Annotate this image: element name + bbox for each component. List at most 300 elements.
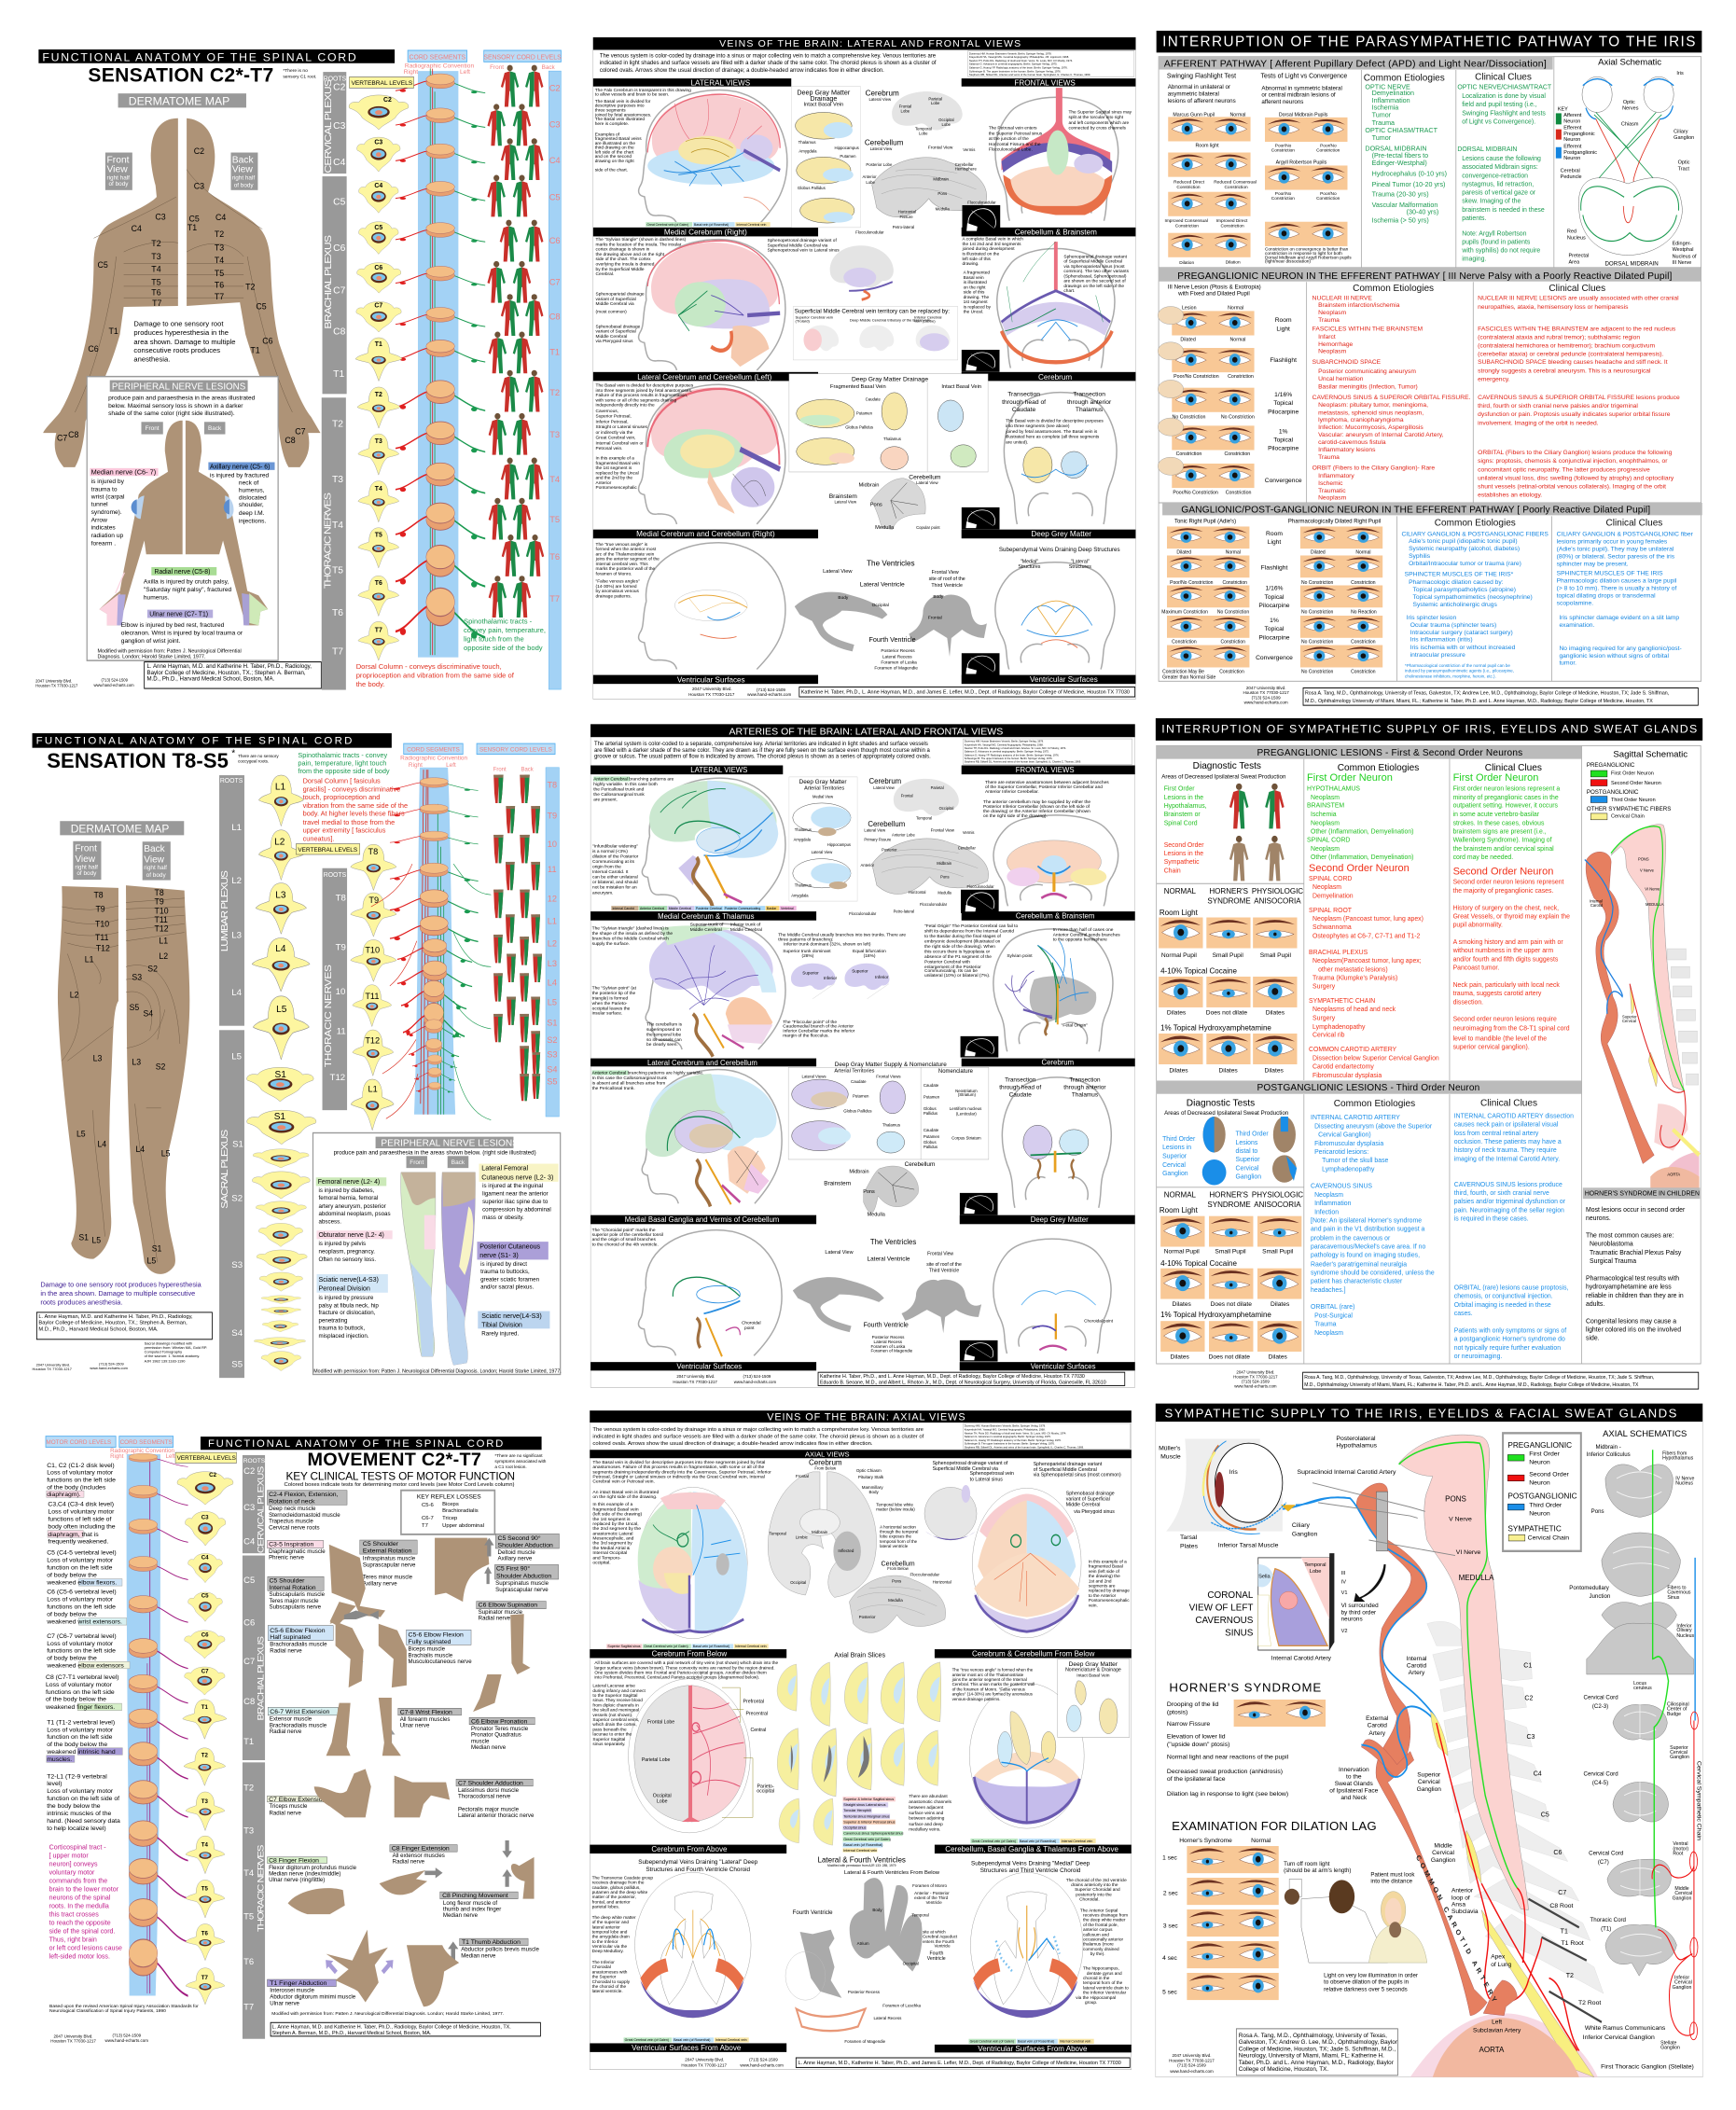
vertebrae: C3 bbox=[201, 1514, 209, 1520]
sensory cord levels heading bbox=[483, 50, 562, 71]
note: sylvian triangle: by the Superficial Middle bbox=[596, 267, 645, 272]
clinical clues: ganglionic: sphincter may be present. bbox=[1557, 561, 1629, 567]
etiologies: post: ORBITAL (rare) bbox=[1311, 1304, 1354, 1311]
deep gray matter territories: Thalamus bbox=[795, 827, 812, 832]
color key row: Posterior Communicating bbox=[725, 907, 760, 910]
note: subependymal left: Choroidal bbox=[592, 1964, 611, 1970]
brain: choroidal: and the origin of small branches bbox=[592, 1237, 656, 1242]
legend: PREGANGLIONIC bbox=[1507, 1441, 1572, 1450]
etiologies: post bbox=[1311, 1099, 1435, 1337]
etiologies: afferent: Pineal Tumor (10-20 yrs) bbox=[1372, 181, 1445, 188]
clinical clues: preganglionic: NUCLEAR III NERVE LESIONS are usually associated with other cranial bbox=[1478, 295, 1679, 301]
frontal brainstem arteries: In more than half of cases one bbox=[1053, 927, 1114, 933]
note: basal vein axial: An intact Basal vein is illustrated bbox=[592, 1490, 660, 1495]
sensory levels column: S1 bbox=[547, 1019, 557, 1028]
test: neck bbox=[267, 1491, 347, 1532]
references: Schlesinger B. The upper brainstem in the human. Berlin: Springer Verlag, 1976. bbox=[965, 1442, 1055, 1446]
note: venous angle: formed when the anterior most bbox=[596, 547, 657, 552]
credits: Computed Tomography bbox=[145, 1350, 182, 1354]
dorsal column note: Dorsal Column [ fasiculus bbox=[303, 776, 381, 784]
gray cerebrum from below: Mammillary bbox=[862, 1485, 883, 1490]
eye diagram: MEDULLA bbox=[1459, 1574, 1494, 1582]
leg dermatome figures: T12 bbox=[155, 924, 169, 934]
swinging flashlight column: Constriction bbox=[1224, 185, 1248, 190]
roots column: T6 bbox=[332, 608, 343, 618]
title: SYMPATHETIC SUPPLY TO THE IRIS, EYELIDS & FACIAL SWEAT GLANDS bbox=[1165, 1406, 1677, 1420]
superficial middle cerebral replacement box bbox=[793, 307, 958, 360]
note: sylvian triangle: marks the location of the insula. The insular bbox=[596, 242, 682, 247]
back view tag bbox=[231, 153, 257, 190]
dermatome note bbox=[40, 1280, 202, 1307]
references bbox=[968, 50, 1134, 76]
note: basal vein axial: replaced by the Uncal, bbox=[592, 1521, 639, 1527]
superficial middle cerebral replacement box: Superior Cerebral vein bbox=[796, 314, 833, 319]
footer: Houston TX 77030-1217 bbox=[673, 1380, 717, 1384]
deep gray matter territories: Hippocampus bbox=[827, 842, 851, 847]
test: shoulder adduction: Latissimus dorsi muscle bbox=[458, 1787, 520, 1794]
swinging flashlight column: Dilation bbox=[1179, 260, 1194, 266]
sphenopetrosal axial: via Sphenoparietal sinus (most common) bbox=[1034, 1473, 1121, 1478]
ganglionic eyes: Dilated bbox=[1311, 550, 1326, 556]
peripheral nerve lesions panel: mass or obesity. bbox=[482, 1215, 524, 1221]
key strips: Great Cerebral vein (of Galen) bbox=[644, 1645, 688, 1648]
panel: peripheral nerve lesions: humerus, bbox=[239, 487, 265, 493]
swinging flashlight column: Constriction bbox=[1271, 196, 1295, 201]
test: pinching: C8 Pinching Movement bbox=[442, 1893, 508, 1899]
panel: peripheral nerve lesions: olecranon. Wrist is injured by local trauma or bbox=[121, 631, 243, 637]
motor level text: level) bbox=[47, 1781, 62, 1787]
brainstem cerebellum lateral: Cerebellum bbox=[909, 475, 941, 481]
note: subependymal right: drains anteriorly into the bbox=[1071, 1882, 1118, 1888]
body dermatome figure: C3 bbox=[155, 213, 166, 222]
swinging flashlight column: Poor/No bbox=[1275, 144, 1292, 149]
artery labels: Internal bbox=[1406, 1656, 1427, 1662]
corticospinal note: Thus, right brain bbox=[49, 1936, 97, 1943]
clinical clues: ganglionic bbox=[1557, 518, 1694, 667]
cerebrum cerebellum from above right: Deep Gray Matter bbox=[1069, 1661, 1118, 1668]
diagnostic tests: post: Areas of Decreased Ipsilateral Sweat Production bbox=[1164, 1110, 1289, 1117]
etiologies: post: INTERNAL CAROTID ARTERY bbox=[1311, 1115, 1400, 1121]
body dermatome figure: T2 bbox=[245, 282, 256, 291]
frontal cerebellum arteries: on the right side of the drawing). bbox=[983, 813, 1048, 819]
panel: peripheral nerve lesions: Modified with permission from: Patten J. Neurological Differential bbox=[97, 648, 242, 654]
test: thumb abduction: T1 Thumb Abduction bbox=[462, 1939, 521, 1946]
diagnostic tests: pre: Small Pupil bbox=[1260, 952, 1291, 959]
panel: peripheral nerve lesions: injections. bbox=[239, 518, 266, 524]
leg dermatome figures: T8 bbox=[155, 888, 164, 897]
middle cerebral branching variants: Superior bbox=[802, 971, 819, 976]
axial schematics: (C7) bbox=[1598, 1859, 1609, 1866]
deep gray matter territories: Amygdala bbox=[791, 893, 809, 897]
motor level text: weakened elbow extensors bbox=[46, 1662, 124, 1669]
axial brain slices: Cavernous sinus Sphenoparietal sinus bbox=[843, 1832, 904, 1836]
note: subependymal right: posteriorly into the bbox=[1076, 1892, 1112, 1897]
body dermatome figure: T4 bbox=[151, 265, 161, 274]
note: subependymal left: temporal lobe and bbox=[592, 1929, 628, 1935]
roots column: C5 bbox=[333, 198, 346, 208]
note: subependymal right: The choroid of the 3rd ventricle bbox=[1066, 1878, 1127, 1883]
frontal vein view: the Superior Petrosal sinus bbox=[989, 131, 1043, 136]
deep gray matter supply: Neostriatum bbox=[955, 1089, 978, 1093]
frontal: cerebrum transection: Transection bbox=[1007, 392, 1040, 398]
deep gray matter fragmented: Putamen bbox=[856, 411, 873, 416]
references bbox=[964, 1423, 1131, 1449]
etiologies: afferent: (30-40 yrs) bbox=[1407, 209, 1438, 216]
note: sylvian triangle: Middle Cerebral bbox=[596, 334, 627, 340]
corticospinal note: side of the spinal cord. bbox=[49, 1927, 116, 1935]
cerebellum: Flocculonodular bbox=[967, 201, 996, 205]
vertebral levels: T6 bbox=[375, 580, 382, 587]
motor level text: Loss of voluntary motor bbox=[47, 1558, 114, 1564]
peripheral nerve lesions panel: PERIPHERAL NERVE LESIONS bbox=[381, 1138, 519, 1148]
note: fragmentation: Pontomesencephalic bbox=[596, 485, 637, 491]
lateral fourth ventricles: Lateral & Fourth Ventricles From Below bbox=[844, 1870, 940, 1876]
clinical clues: post: ORBITAL (rare) lesions cause proptosis, bbox=[1454, 1285, 1569, 1292]
motor level text: Loss of voluntary motor bbox=[46, 1682, 113, 1688]
leg dermatome figures: L3 bbox=[132, 1057, 141, 1066]
note: sylvian triangle: cortex drainage is shown in bbox=[596, 247, 650, 253]
cord level headings: CORD SEGMENTS bbox=[120, 1439, 173, 1446]
note: fragmented: In this example of a bbox=[1089, 1560, 1127, 1565]
children horner: reliable in children than they are in bbox=[1586, 1293, 1684, 1299]
diagnostic tests: post: SYNDROME bbox=[1207, 1201, 1251, 1209]
note: fragmentation: Cavernous, bbox=[596, 409, 618, 414]
frontal brainstem arteries: to the Basilar during the final stages of bbox=[924, 934, 1002, 939]
deep gray matter drainage: Intact Basal Vein bbox=[804, 102, 843, 107]
deep gray matter supply: Thalamus bbox=[882, 1123, 901, 1128]
etiologies: ganglionic: Topical sympathomimetics (neosynephrine) bbox=[1413, 594, 1533, 601]
diagnostic tests: pre: Lesions in the bbox=[1164, 795, 1203, 801]
sensory levels column: L5 bbox=[548, 998, 557, 1007]
note: lacunae: Lateral Lacunae arise bbox=[592, 1684, 635, 1689]
peripheral nerve lesions panel: produce pain and paraesthesia in the areas shown below. (right side illustrated) bbox=[334, 1149, 536, 1156]
peripheral nerve lesions panel: Back bbox=[451, 1159, 465, 1166]
cavernous sinus coronal: SINUS bbox=[1225, 1628, 1254, 1638]
subependymal veins frontal: Structures bbox=[1018, 564, 1041, 570]
color key row: Posterior Cerebral bbox=[696, 907, 722, 910]
key strips: Superior Sagittal sinus bbox=[607, 1645, 641, 1648]
deep gray matter drainage: Amygdala bbox=[799, 148, 817, 153]
roots bars: S2 bbox=[231, 1194, 243, 1203]
axial schematics: Olivary bbox=[1676, 1628, 1692, 1633]
key strip: Basal vein (of Rosenthal) bbox=[694, 223, 729, 227]
axial schematic: Nerves bbox=[1622, 106, 1639, 112]
brain: choroidal: point bbox=[744, 1326, 755, 1331]
credits: Houston TX 77030-1217 bbox=[35, 684, 78, 688]
clinical clues: post: not typically require further evaluation bbox=[1454, 1345, 1561, 1352]
title: FUNCTIONAL ANATOMY OF THE SPINAL CORD bbox=[208, 1438, 503, 1450]
body dermatome figure: T1 bbox=[109, 326, 118, 336]
diagnostic tests: pre: Sympathetic bbox=[1164, 859, 1200, 866]
footer: L. Anne Hayman, M.D., Katherine H. Taber, Ph.D., and James E. Lefler, M.D., Dept. of Radiology, Baylor College of Medicine, Houston TX 77030 bbox=[799, 2061, 1121, 2066]
axial schematics: Inferior bbox=[1676, 1623, 1692, 1629]
dermatome note: roots produces anesthesia. bbox=[40, 1298, 122, 1307]
leg level figures bbox=[493, 775, 542, 1101]
axial brain slices: There are abundant bbox=[909, 1794, 948, 1799]
test: elbow flexion half: Radial nerve bbox=[270, 1647, 302, 1654]
body dermatome figure: T5 bbox=[215, 269, 224, 278]
citation: (713) 524-1509 bbox=[113, 2033, 142, 2037]
title: INTERRUPTION OF THE PARASYMPATHETIC PATHWAY TO THE IRIS bbox=[1162, 35, 1695, 50]
axial schematics: Locus bbox=[1633, 1681, 1646, 1687]
middle cerebral branching variants: Inferior trunk dominant (32%, shown on left) bbox=[784, 941, 871, 947]
motor level text: muscles. bbox=[47, 1756, 72, 1763]
test: elbow flexion full: Biceps muscle bbox=[409, 1645, 446, 1652]
frontal cerebellum brainstem bbox=[997, 242, 1115, 368]
spine labels: T1 bbox=[1561, 1928, 1568, 1935]
etiologies: post: Neoplasm bbox=[1314, 1330, 1343, 1337]
swinging flashlight column: Abnormal in unilateral or bbox=[1168, 84, 1230, 90]
artery labels: Cervical bbox=[1418, 1779, 1440, 1785]
gray cerebrum from below: Limbic bbox=[796, 1535, 809, 1540]
note: sylvian triangle: Superior trunk of bbox=[690, 923, 724, 928]
credits: L. Anne Hayman, M.D. and Katherine H. Taber, Ph.D., Radiology, bbox=[147, 663, 312, 670]
etiologies: preganglionic: Ischemic bbox=[1318, 480, 1343, 487]
peripheral nerve lesions panel: misplaced injection. bbox=[319, 1333, 369, 1340]
diagnostic tests: pre: Diagnostic Tests bbox=[1193, 761, 1261, 771]
axial venous view left bbox=[638, 1487, 747, 1639]
deep gray matter drainage: Drainage bbox=[810, 95, 837, 103]
roots column: T6 bbox=[243, 1957, 254, 1967]
roots bars: T9 bbox=[336, 942, 346, 952]
footer: Houston TX 77030-1217 bbox=[681, 2062, 727, 2067]
subependymal medial axial bbox=[970, 1860, 1090, 2018]
ganglionic eyes: No Reaction bbox=[1351, 610, 1377, 616]
diagnostic tests: post: Room Light bbox=[1160, 1206, 1199, 1215]
panel: peripheral nerve lesions: is injured by fractured bbox=[210, 473, 270, 479]
panel: peripheral nerve lesions bbox=[87, 377, 278, 660]
cavernous sinus coronal: Sella bbox=[1258, 1575, 1271, 1580]
deep gray matter drainage bbox=[792, 87, 861, 228]
aorta arch bbox=[1433, 2018, 1579, 2077]
gray cerebrum from below: Pituitary Stalk bbox=[858, 1475, 884, 1479]
III nerve lesion eyes: Convergence bbox=[1265, 478, 1302, 484]
dilation lag: 4 sec bbox=[1162, 1955, 1178, 1962]
cerebellum: Cerebellar bbox=[955, 162, 974, 167]
sensory levels column: T9 bbox=[547, 811, 557, 820]
key strip: Great Cerebral vein (of Galen) bbox=[625, 2038, 669, 2042]
lateral fourth ventricles: Occipital bbox=[903, 1961, 919, 1965]
test: shoulder abduction: Shoulder Abduction bbox=[498, 1543, 553, 1549]
horner's syndrome: ("upside down" ptosis) bbox=[1167, 1742, 1229, 1748]
test: wrist extension: Brachioradialis muscle bbox=[270, 1723, 327, 1729]
gray cerebrum from below: Cerebrum bbox=[809, 1458, 842, 1466]
roots bars: L5 bbox=[231, 1052, 242, 1062]
heading: sensation: sensory C1 root. bbox=[283, 74, 316, 79]
note: fragmentation: or indirectly via the bbox=[596, 430, 633, 436]
panel: peripheral nerve lesions: Arrow bbox=[91, 517, 107, 523]
legend: First Order bbox=[1529, 1451, 1561, 1457]
peripheral nerve lesions panel: Rarely injured. bbox=[481, 1331, 519, 1338]
footer: (713) 524-1509 bbox=[1252, 695, 1281, 700]
brainstem cerebellum lateral: Lateral View bbox=[835, 499, 857, 504]
eye diagram: Posterolateral bbox=[1336, 1436, 1376, 1442]
vertebrae: T7 bbox=[201, 1975, 209, 1981]
swinging flashlight column: Dilation bbox=[1226, 260, 1241, 266]
note: falx: joined by fetal anastomoses. bbox=[594, 112, 651, 118]
etiologies: ganglionic: Pharmacologic dilation caused by: bbox=[1409, 579, 1504, 586]
roots labels: First Thoracic Ganglion (Stellate) bbox=[1601, 2063, 1694, 2070]
clinical clues: afferent bbox=[1457, 73, 1552, 263]
spine labels: C3 bbox=[1526, 1734, 1535, 1741]
ganglionic eyes: Topical bbox=[1265, 594, 1285, 601]
peripheral nerve lesions panel: trauma to buttocks, bbox=[480, 1269, 530, 1275]
ganglionic eyes: Constriction bbox=[1222, 580, 1247, 586]
roots column: T7 bbox=[243, 2003, 254, 2013]
etiologies: post: Common Etiologies bbox=[1334, 1099, 1415, 1109]
footer: Houston TX 77030-1217 bbox=[688, 692, 735, 697]
key reflex losses: C6-7 bbox=[422, 1516, 434, 1521]
axial schematics: Fibers to bbox=[1667, 1585, 1687, 1590]
note: basal vein axial: on the right side of the drawing. bbox=[592, 1494, 657, 1500]
frontal brainstem arteries: embryonic development (illustrated on bbox=[924, 939, 1001, 945]
test: external rotation: External Rotation bbox=[363, 1548, 412, 1555]
diagnostic tests: post: Dilates bbox=[1173, 1301, 1192, 1308]
test: elbow supination bbox=[473, 1602, 546, 1712]
citation: www.hand-echarts.com bbox=[104, 2038, 148, 2043]
clinical clues: pre: Neck pain, particularly with local neck bbox=[1453, 982, 1560, 989]
note: subependymal left: of the superior and bbox=[592, 1920, 629, 1925]
clinical clues: pre: cord may be needed. bbox=[1453, 854, 1513, 861]
note: fragmentation: In this example of a bbox=[596, 456, 634, 462]
note: fragmentation: independently directly into the bbox=[596, 403, 655, 409]
sphenopetrosal axial: Middle Cerebral bbox=[1066, 1503, 1100, 1508]
cerebellum and brainstem: Cerebellum bbox=[905, 1161, 935, 1168]
roots labels bbox=[1528, 1899, 1694, 2070]
cerebrum cerebellum from above right: The "true venous angle" is formed when the bbox=[952, 1668, 1034, 1673]
etiologies: pre: Fibromuscular dysplasia bbox=[1312, 1073, 1382, 1079]
etiologies: pre: COMMON CAROTID ARTERY bbox=[1309, 1047, 1397, 1053]
axial schematic: Afferent bbox=[1563, 113, 1582, 118]
footer: M.D., Ophthalmology University of Miami, Miami, FL.; Katherine H. Taber, Ph.D. and L. Anne Hayman, M.D., Radiology, Baylor College of Medicine, Houston, TX bbox=[1304, 1382, 1639, 1388]
note: subependymal left: Deep Medullary. bbox=[592, 1949, 624, 1954]
deep gray matter supply: Caudate bbox=[924, 1083, 939, 1088]
references: Salamon G. Advances in cerebral angiography. Berlin: Springer Verlag, 1975. bbox=[965, 750, 1049, 754]
etiologies: post: Infection bbox=[1314, 1209, 1339, 1215]
axial schematics: Cervical bbox=[1670, 1750, 1687, 1756]
thoracic vertebrae: VERTEBRAL LEVELS bbox=[298, 847, 357, 854]
clinical clues: ganglionic: topical dilating drops or transdermal bbox=[1557, 592, 1656, 599]
swinging flashlight column: Swinging Flashlight Test bbox=[1167, 74, 1236, 80]
roots bars: L3 bbox=[231, 931, 242, 941]
etiologies: ganglionic: Common Etiologies bbox=[1435, 518, 1516, 528]
motor level text: of body below the bbox=[47, 1612, 97, 1618]
frontal brainstem arteries: "Fetal Origin" bbox=[1062, 1023, 1088, 1029]
test: elbow pronation: muscle bbox=[471, 1739, 490, 1745]
note: subependymal right: the Inferior Ventricular bbox=[1083, 1991, 1127, 1996]
deep gray matter drainage: Globus Pallidus bbox=[798, 186, 826, 190]
legend: Cervical Chain bbox=[1528, 1535, 1569, 1542]
swinging flashlight column: Poor/No bbox=[1275, 191, 1292, 197]
credits: www.hand-echarts.com bbox=[93, 683, 134, 687]
clinical clues: afferent: associated Midbrain signs: bbox=[1462, 164, 1538, 171]
ventricles: Lateral Ventricle bbox=[868, 1256, 910, 1262]
test: finger abduction: Abductor digitorum minimi muscle bbox=[270, 1993, 356, 2000]
horner's syndrome: HORNER'S SYNDROME bbox=[1169, 1680, 1321, 1694]
etiologies: preganglionic: Vascular: aneurysm of Internal Carotid Artery, bbox=[1318, 432, 1444, 438]
cerebellum: Medulla bbox=[936, 207, 950, 212]
etiologies: pre: Demyelination bbox=[1312, 893, 1354, 899]
note: falx: three segments bbox=[595, 107, 626, 113]
etiologies: afferent: Vascular Malformation bbox=[1372, 201, 1437, 209]
references: Salamon G. Advances in cerebral angiography. Berlin: Springer Verlag, 1975. bbox=[965, 1435, 1051, 1438]
III nerve lesion eyes: Normal bbox=[1230, 337, 1245, 342]
note: basal vein: Sphenoparietal drainage variant bbox=[1063, 254, 1128, 259]
eye diagram bbox=[1159, 1436, 1494, 1582]
superficial middle cerebral replacement box: Deep Middle Cerebral tributary of the Basal vein bbox=[850, 317, 930, 322]
diagnostic tests: pre: PHYSIOLOGIC bbox=[1252, 887, 1303, 895]
note: basal vein: A fragmented bbox=[964, 271, 990, 276]
section bars: Ventricular Surfaces bbox=[1031, 1362, 1096, 1371]
III nerve lesion eyes: Light bbox=[1276, 326, 1290, 332]
deep gray matter supply: Caudate bbox=[851, 1079, 867, 1084]
motor level text: T1 (T1-2 vertebral level) bbox=[47, 1719, 115, 1726]
note: fragmentation: with some or all of the segments draining bbox=[596, 397, 677, 403]
body dermatome figure: T1 bbox=[187, 223, 197, 232]
credits: (713) 524-1509 bbox=[101, 678, 129, 683]
roots column: T4 bbox=[243, 1868, 254, 1879]
diagnostic tests: pre: Dilates bbox=[1169, 1068, 1188, 1075]
etiologies: pre: Common Etiologies bbox=[1338, 763, 1419, 773]
frontal vein view: Flocculonodular Lobe. bbox=[989, 147, 1033, 153]
note: sylvian triangle: triangle) is formed bbox=[592, 996, 629, 1002]
axial schematic: Cerebral bbox=[1561, 169, 1580, 174]
swinging flashlight column: Dorsal Midbrain Pupils bbox=[1279, 113, 1328, 118]
corticospinal note bbox=[49, 1843, 122, 1960]
eye diagram: Ciliary bbox=[1292, 1522, 1310, 1529]
axial schematic: Iris bbox=[1676, 71, 1684, 76]
sagittal schematic: Cervical Chain bbox=[1611, 814, 1645, 820]
etiologies: post: Raeder's paratrigeminal neuralgia bbox=[1311, 1261, 1407, 1268]
note: venous angle: (14-30%) are formed bbox=[596, 584, 637, 590]
frontal: cerebrum transection: The Basal vein is divided for descriptive purposes bbox=[1006, 418, 1104, 423]
references: Krayenbuhl HA, Yasargil MG. Cerebral Angiography. Philadelphia, 1968. bbox=[965, 1428, 1046, 1432]
test: finger abduction: Ulnar nerve bbox=[270, 2000, 300, 2006]
dilation lag bbox=[1162, 1819, 1377, 2000]
cavernous sinus coronal: VIEW OF LEFT bbox=[1189, 1603, 1253, 1614]
section bars: Ventricular Surfaces From Above bbox=[978, 2045, 1088, 2053]
thoracic vertebrae: L1 bbox=[368, 1084, 378, 1093]
test: wrist flexion: C7-8 Wrist Flexion bbox=[400, 1709, 452, 1715]
ganglionic eyes: 1% bbox=[1270, 618, 1279, 624]
third order neuron path bbox=[1275, 1497, 1437, 1777]
sensory levels column: T4 bbox=[549, 475, 560, 484]
horner's syndrome: Normal light and near reactions of the pupil bbox=[1167, 1755, 1289, 1761]
key strip: Great Cerebral vein (of Galen) bbox=[972, 1839, 1016, 1843]
sagittal schematic: Third Order Neuron bbox=[1611, 798, 1656, 803]
dermatome note: produces hyperesthesia in the bbox=[133, 328, 229, 337]
test: pinching: Median nerve bbox=[443, 1912, 479, 1919]
note: basal vein axial: and Temporo- bbox=[592, 1555, 621, 1561]
etiologies: pre: Neoplasm bbox=[1311, 820, 1340, 826]
cerebrum and cerebellum gray: Frontal View bbox=[931, 828, 955, 833]
etiologies: pre: Other (Inflammation, Demyelination) bbox=[1311, 829, 1413, 836]
dorsal column note: body. At higher levels these fibers bbox=[303, 810, 405, 818]
roots bars: L2 bbox=[231, 876, 242, 886]
leg dermatome figures: S2 bbox=[156, 1062, 166, 1072]
note: basal vein axial bbox=[592, 1460, 771, 1566]
note: venous angle: arc of the Thalamostriate vein bbox=[596, 551, 655, 557]
clinical clues: preganglionic: (contralateral ataxia and rubral tremor); subthalamic region bbox=[1478, 334, 1640, 340]
diagnostic tests: pre: NORMAL bbox=[1164, 887, 1197, 895]
sensory levels column bbox=[549, 71, 561, 689]
peripheral nerve lesions panel: is injured by pressure bbox=[319, 1295, 374, 1301]
axial schematic: Axial Schematic bbox=[1598, 57, 1661, 67]
dermatome heading: DERMATOME MAP bbox=[129, 94, 229, 107]
test: wrist extension: Radial nerve bbox=[270, 1728, 302, 1735]
vertebral levels: C7 bbox=[374, 303, 382, 310]
axial brain slices: Torcular Herophili bbox=[843, 1809, 871, 1812]
